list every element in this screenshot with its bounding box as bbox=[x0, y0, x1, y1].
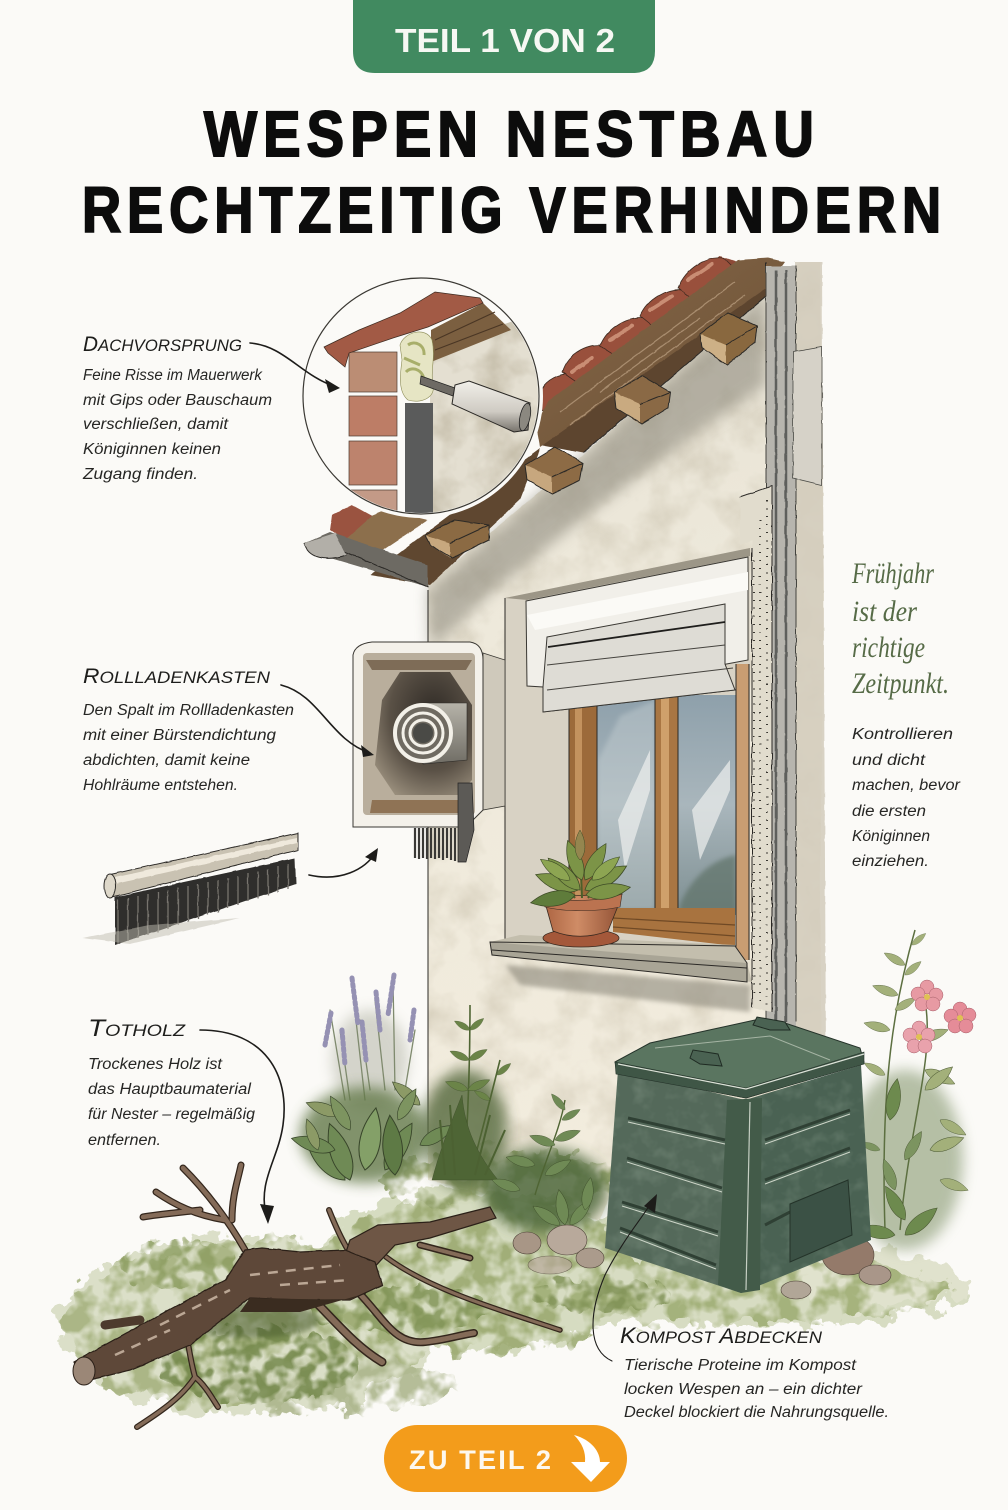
callout: spring timing: und dicht bbox=[852, 752, 926, 769]
badge: part 1 of 2: TEIL 1 VON 2 bbox=[395, 22, 615, 59]
arrow: to compost bbox=[593, 1194, 657, 1361]
arrow: brush to box bbox=[309, 848, 378, 877]
callout: Rollladenkasten: abdichten, damit keine bbox=[83, 752, 250, 769]
arrow: to shutter box bbox=[281, 685, 374, 757]
illustration: dead wood branches bbox=[73, 1165, 560, 1427]
callout: Dachvorsprung: DACHVORSPRUNG bbox=[83, 333, 242, 356]
rafter block bbox=[614, 376, 670, 424]
callout: Totholz: entfernen. bbox=[88, 1132, 161, 1149]
callout: Rollladenkasten: Hohlräume entstehen. bbox=[83, 777, 238, 794]
callout: spring timing: Zeitpunkt. bbox=[852, 667, 949, 700]
illustration: eave and roof bbox=[304, 256, 785, 587]
hatch bbox=[790, 1180, 852, 1262]
callout: Totholz bbox=[88, 1015, 255, 1149]
callout: spring timing: Kontrollieren bbox=[852, 726, 953, 743]
brush seal bbox=[415, 828, 463, 862]
callout: spring timing: machen, bevor bbox=[852, 777, 961, 794]
gutter bbox=[304, 532, 428, 587]
callout: Dachvorsprung bbox=[82, 333, 272, 483]
dark hollow bbox=[375, 672, 472, 795]
window panes bbox=[590, 695, 738, 915]
button: to part 2: ZU TEIL 2 bbox=[409, 1445, 553, 1475]
callout: Kompost abdecken: Tierische Proteine im Kompost bbox=[624, 1357, 857, 1374]
thin branches bbox=[137, 1165, 560, 1427]
callout: spring timing: Königinnen bbox=[852, 828, 930, 845]
callout: Kompost abdecken: Deckel blockiert die Nahrungsquelle. bbox=[624, 1404, 889, 1421]
thick right branch bbox=[340, 1207, 496, 1272]
callout: Rollladenkasten bbox=[83, 665, 294, 794]
beam and rafters bbox=[330, 258, 785, 585]
arrow: to roof detail bbox=[250, 343, 340, 393]
callout: Totholz: Trockenes Holz ist bbox=[88, 1056, 223, 1073]
illustration: compost bin bbox=[605, 1017, 871, 1293]
arrow: to dead wood bbox=[200, 1030, 284, 1224]
window sill bbox=[490, 935, 752, 1012]
rafter block bbox=[525, 447, 583, 494]
callout: Rollladenkasten: mit einer Bürstendichtung bbox=[83, 727, 276, 744]
foam bbox=[400, 332, 433, 401]
callout: Dachvorsprung: Feine Risse im Mauerwerk bbox=[83, 367, 263, 384]
front left face bbox=[605, 1070, 745, 1293]
roof tile cap bbox=[324, 292, 483, 367]
illustration: garden plants left bbox=[290, 975, 607, 1232]
callout: Kompost abdecken: KOMPOST ABDECKEN bbox=[620, 1323, 823, 1348]
trunk bbox=[74, 1248, 382, 1382]
brick wall bbox=[349, 352, 397, 520]
rafter block bbox=[425, 520, 489, 558]
illustration: roller shutter box cutaway bbox=[353, 642, 505, 862]
wood beam bbox=[431, 303, 511, 362]
callout: Kompost abdecken bbox=[620, 1323, 889, 1421]
roof tiles bbox=[540, 256, 738, 412]
illustration: house wall bbox=[428, 262, 826, 1220]
sealant gun bbox=[420, 376, 533, 432]
illustration: window bbox=[490, 548, 752, 1012]
tall grassy plant bbox=[432, 1005, 513, 1180]
callout: spring timing: einziehen. bbox=[852, 853, 929, 870]
callout: Rollladenkasten: Den Spalt im Rollladenkasten bbox=[83, 702, 294, 719]
callout: spring timing bbox=[851, 557, 961, 870]
illustration: brush strip bbox=[82, 833, 298, 945]
broad leaves bbox=[290, 1077, 457, 1186]
illustration: drainpipe and corner post bbox=[740, 266, 822, 1026]
low shrub by composter bbox=[490, 1092, 596, 1229]
roller shutter box bbox=[526, 557, 748, 712]
callout: spring timing: die ersten bbox=[852, 803, 926, 820]
illustration: flowering plant right bbox=[847, 930, 976, 1250]
callout: Dachvorsprung: verschließen, damit bbox=[83, 416, 229, 433]
right face bbox=[741, 1065, 871, 1293]
dark cavity bbox=[405, 403, 433, 513]
callout: Dachvorsprung: Zugang finden. bbox=[82, 466, 198, 483]
title bbox=[82, 98, 947, 246]
callout: Rollladenkasten: ROLLLADENKASTEN bbox=[83, 665, 271, 688]
title: WESPEN NESTBAU bbox=[204, 98, 820, 170]
callout: Dachvorsprung: Königinnen keinen bbox=[83, 441, 221, 458]
roll bbox=[423, 703, 467, 764]
lid bbox=[615, 1017, 864, 1098]
flower pot bbox=[541, 894, 622, 947]
badge: part 1 of 2 bbox=[353, 0, 655, 73]
lavender bbox=[325, 975, 415, 1110]
flowers bbox=[903, 980, 976, 1053]
potted plant bbox=[529, 830, 632, 910]
corner post bbox=[718, 1098, 762, 1293]
plaster wall bbox=[430, 322, 538, 512]
illustration: rocks bbox=[513, 1225, 891, 1299]
button: to part 2 bbox=[384, 1425, 627, 1492]
illustration: grass ground bbox=[60, 1150, 965, 1413]
callout: spring timing: ist der bbox=[852, 595, 917, 628]
window frame bbox=[569, 664, 749, 960]
callout: Dachvorsprung: mit Gips oder Bauschaum bbox=[83, 392, 272, 409]
slats bbox=[620, 1110, 850, 1265]
callout: Totholz: TOTHOLZ bbox=[88, 1015, 186, 1042]
callout: spring timing: richtige bbox=[852, 631, 925, 664]
icon: curved down arrow bbox=[571, 1435, 610, 1482]
rafter block bbox=[700, 313, 757, 365]
callout: Totholz: für Nester – regelmäßig bbox=[88, 1106, 255, 1123]
callout: Totholz: das Hauptbaumaterial bbox=[88, 1081, 252, 1098]
callout: spring timing: Frühjahr bbox=[851, 557, 934, 590]
illustration: detail circle with sealant bbox=[299, 274, 545, 520]
callout: Kompost abdecken: locken Wespen an – ein dichter bbox=[624, 1381, 863, 1398]
